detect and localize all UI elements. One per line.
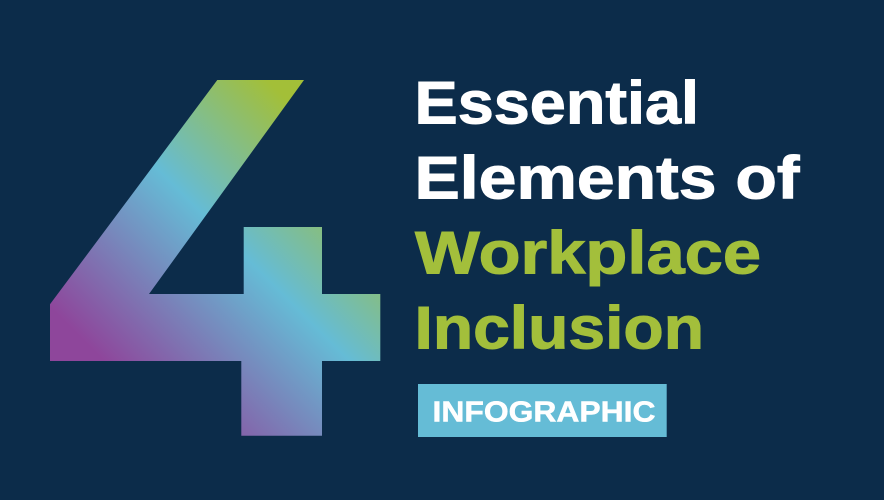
large gradient numeral 4 [50,80,380,436]
badge: INFOGRAPHIC: INFOGRAPHIC [432,397,656,429]
title line: Workplace: Workplace [415,219,761,286]
title [414,69,801,361]
badge: INFOGRAPHIC [418,384,667,437]
title line: Essential: Essential [414,69,699,136]
title line: Inclusion: Inclusion [414,294,704,361]
title line: Elements of: Elements of [414,144,801,211]
